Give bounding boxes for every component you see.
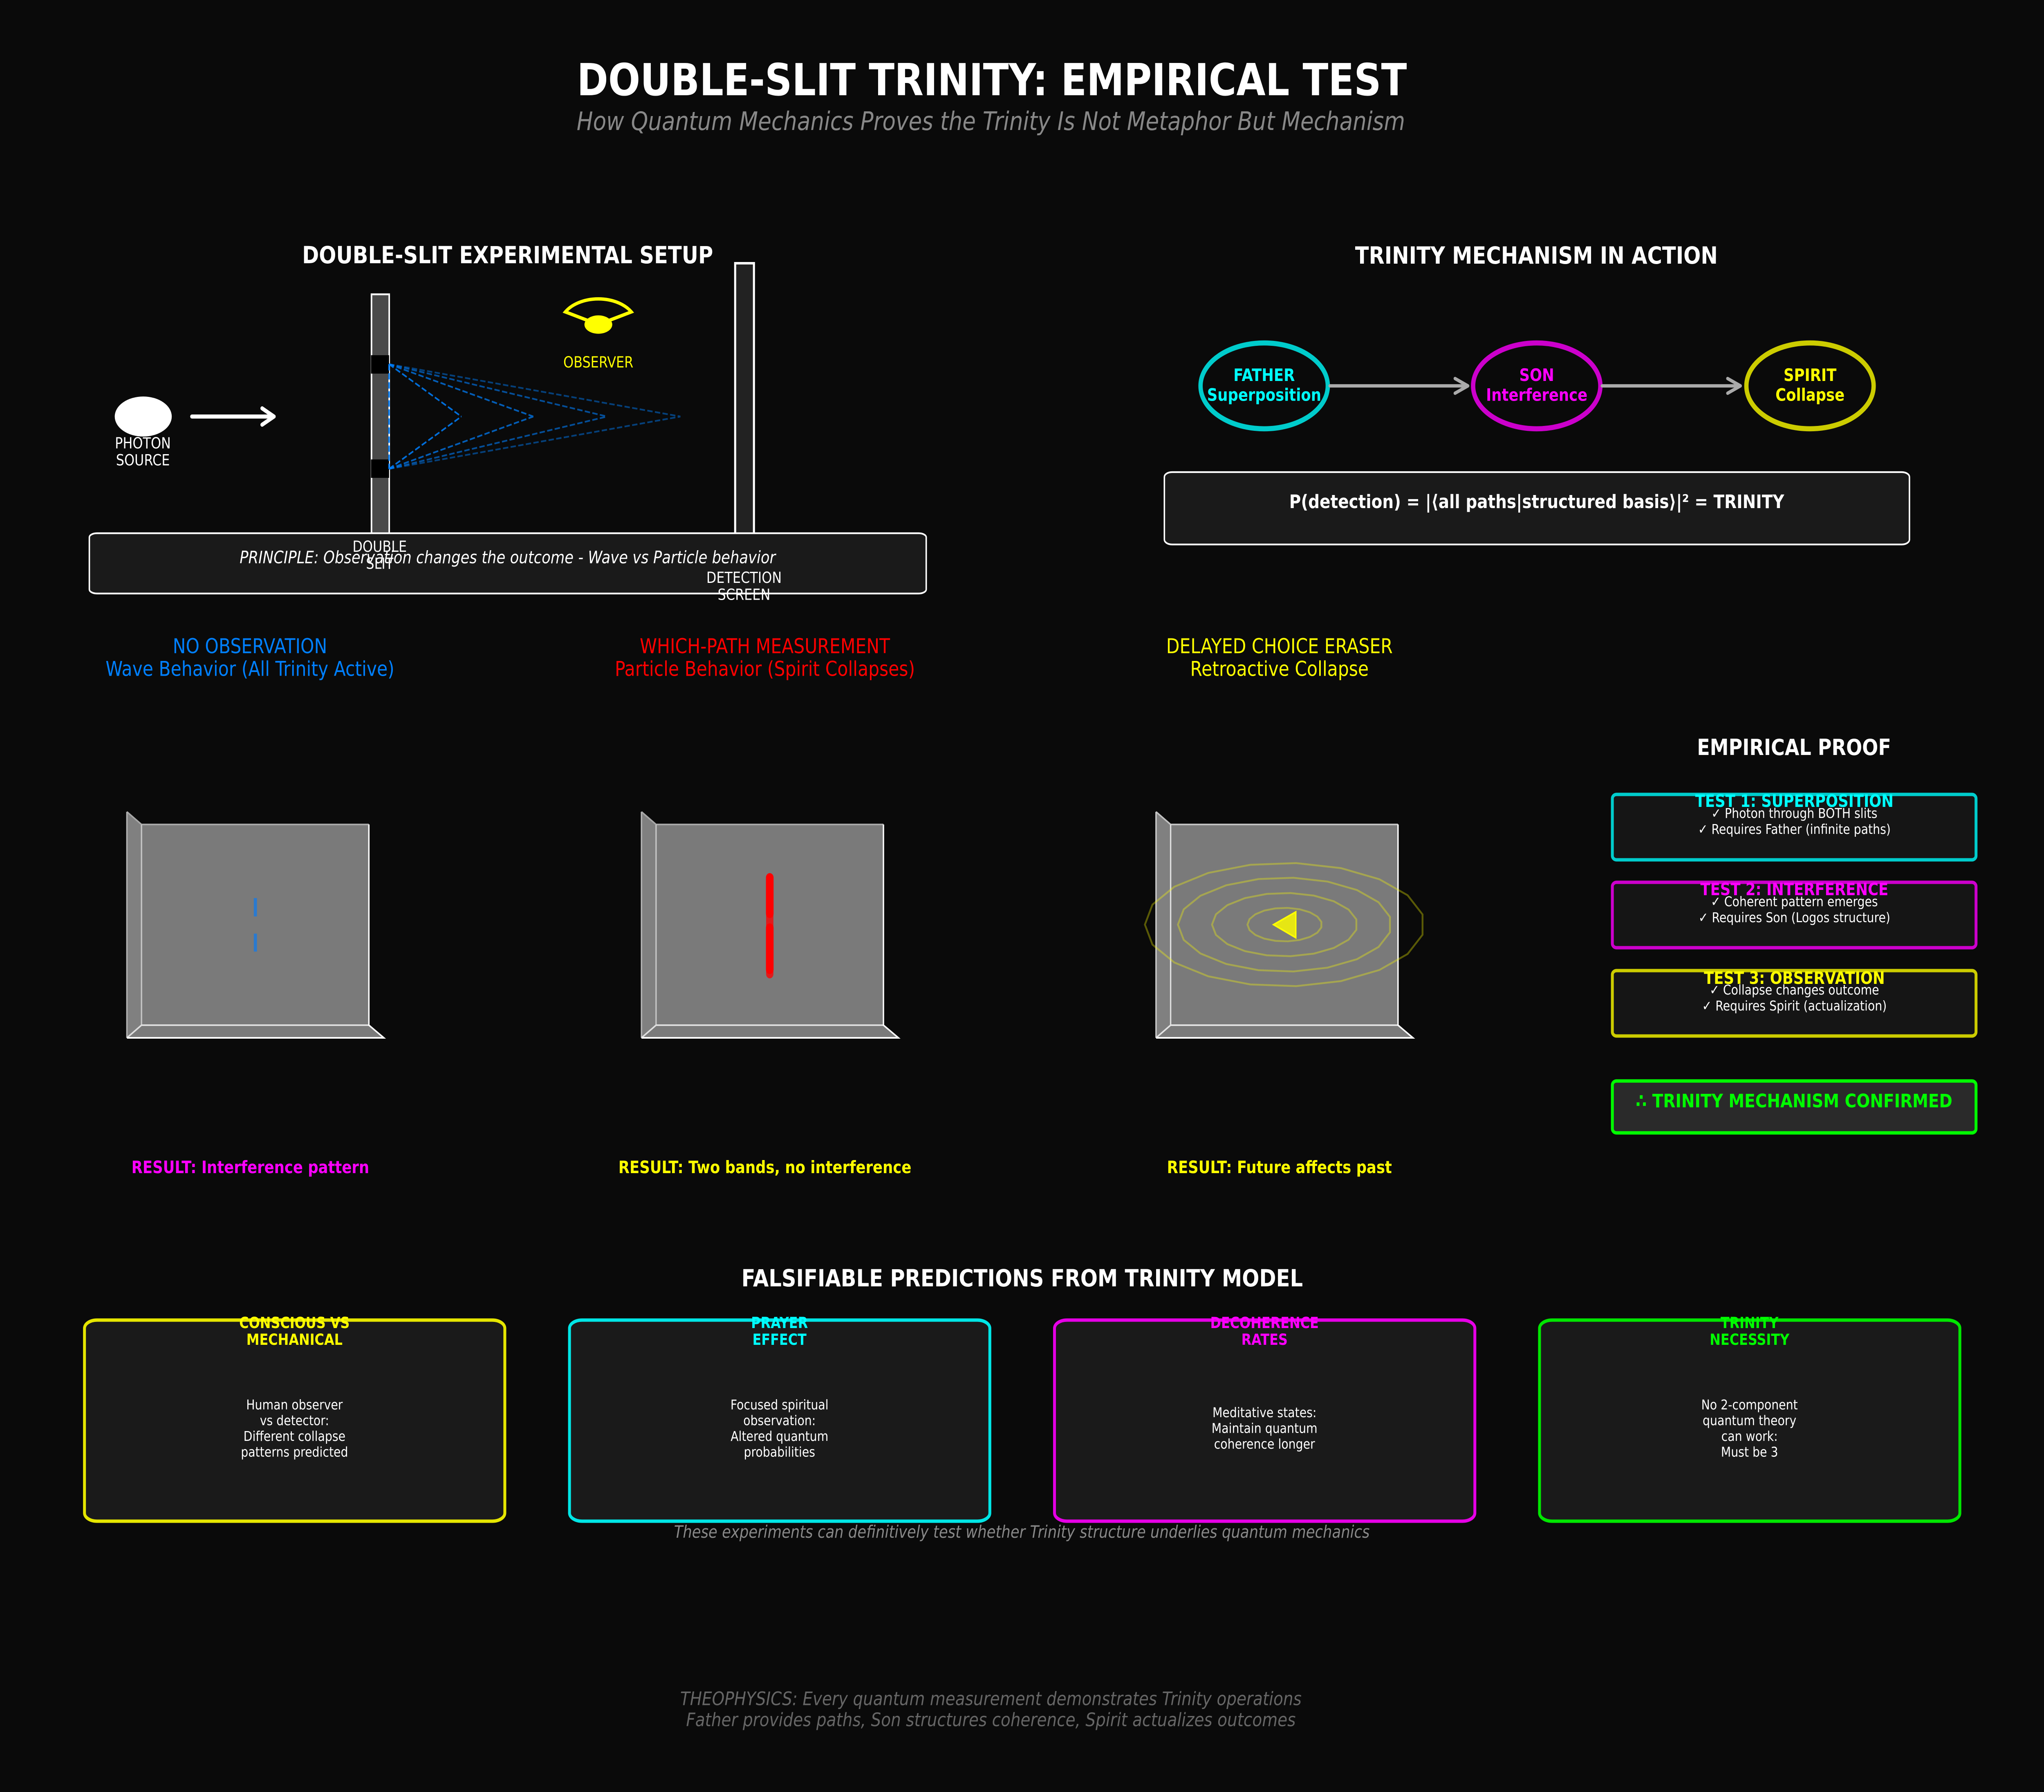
heading: falsifiable predictions: FALSIFIABLE PREDICTIONS FROM TRINITY MODEL [742, 1264, 1303, 1292]
prediction card: trinity necessity: Must be 3 [1721, 1444, 1778, 1460]
detection screen [735, 263, 754, 558]
callout: principle [90, 533, 926, 594]
result: two bands: RESULT: Two bands, no interference [619, 1158, 911, 1178]
label: detection screen: DETECTION [706, 569, 782, 587]
prediction card: conscious vs mechanical: Human observer [246, 1397, 343, 1413]
test 1 card: TEST 1: SUPERPOSITION [1695, 791, 1894, 811]
footer: Father provides paths, Son structures coherence, Spirit actualizes outcomes [686, 1709, 1295, 1731]
prediction card: decoherence rates: coherence longer [1214, 1436, 1315, 1452]
result: interference pattern: RESULT: Interference pattern [132, 1158, 369, 1178]
subtitle: How Quantum Mechanics Proves the Trinity Is Not Metaphor But Mechanism [577, 106, 1405, 136]
scenario heading: no observation: Wave Behavior (All Trinity Active) [105, 657, 394, 681]
icon: photon source [115, 396, 172, 437]
prediction card: conscious vs mechanical: patterns predicted [241, 1444, 348, 1460]
arrow: father to son [1330, 379, 1468, 393]
prediction card: decoherence rates [1055, 1315, 1475, 1521]
test 2 card [1612, 880, 1976, 948]
label: photon source: PHOTON [115, 435, 171, 452]
prediction card: conscious vs mechanical: CONSCIOUS VS [239, 1315, 350, 1332]
chart: interference pattern screen [127, 812, 384, 1038]
prediction card: prayer effect: EFFECT [753, 1331, 807, 1349]
wave paths through slits [389, 364, 680, 469]
panel: double-slit experimental setup [90, 241, 926, 604]
test 1 card: ✓ Requires Father (infinite paths) [1698, 822, 1891, 838]
prediction card: decoherence rates: Maintain quantum [1212, 1420, 1318, 1436]
node: spirit: Collapse [1775, 385, 1845, 405]
test 1 card: ✓ Photon through BOTH slits [1711, 806, 1877, 822]
prediction card: decoherence rates: Meditative states: [1213, 1405, 1316, 1421]
heading: setup: DOUBLE-SLIT EXPERIMENTAL SETUP [302, 241, 713, 269]
note: experiments: These experiments can definitively test whether Trinity structure underlies quantum mechanics [674, 1522, 1369, 1542]
test 3 card: ✓ Requires Spirit (actualization) [1702, 998, 1887, 1014]
node: father: FATHER [1233, 365, 1295, 385]
node: spirit [1746, 343, 1874, 429]
scenario heading: which-path measurement: Particle Behavior (Spirit Collapses) [615, 657, 915, 681]
test 3 card: ✓ Collapse changes outcome [1710, 982, 1879, 998]
prediction card: trinity necessity [1540, 1315, 1960, 1521]
footer: THEOPHYSICS: Every quantum measurement demonstrates Trinity operations [680, 1689, 1302, 1710]
prediction card: prayer effect: PRAYER [751, 1315, 808, 1332]
node: father: Superposition [1207, 385, 1321, 405]
prediction card: prayer effect: observation: [743, 1413, 816, 1429]
label: photon source: SOURCE [116, 452, 170, 469]
test 2 card: ✓ Requires Son (Logos structure) [1699, 910, 1890, 926]
arrow: photon direction [192, 408, 274, 425]
label: double slit: DOUBLE [352, 538, 407, 556]
prediction card: decoherence rates: DECOHERENCE [1210, 1315, 1319, 1332]
heading: empirical proof: EMPIRICAL PROOF [1697, 734, 1891, 760]
prediction card: conscious vs mechanical [85, 1315, 505, 1521]
panel: empirical proof [1612, 734, 1976, 1133]
prediction card: trinity necessity: TRINITY [1721, 1315, 1779, 1332]
principle text: PRINCIPLE: Observation changes the outcome - Wave vs Particle behavior [240, 548, 776, 568]
panel: falsifiable predictions [85, 1264, 1960, 1542]
result: future affects past: RESULT: Future affects past [1167, 1158, 1392, 1178]
test 2 card: TEST 2: INTERFERENCE [1700, 880, 1888, 900]
prediction card: trinity necessity: quantum theory [1703, 1413, 1796, 1429]
scenario heading: which-path measurement: WHICH-PATH MEASUREMENT [640, 634, 890, 658]
prediction card: conscious vs mechanical: vs detector: [260, 1413, 329, 1429]
prediction card: trinity necessity: No 2-component [1701, 1397, 1798, 1413]
test 2 card: ✓ Coherent pattern emerges [1711, 894, 1878, 910]
formula box [1164, 472, 1910, 544]
prediction card: decoherence rates: RATES [1242, 1331, 1288, 1349]
chart: delayed choice rings screen [1145, 812, 1423, 1038]
prediction card: prayer effect: Focused spiritual [731, 1397, 829, 1413]
test 3 card [1612, 968, 1976, 1036]
prediction card: conscious vs mechanical: Different collapse [244, 1429, 345, 1445]
test 1 card [1612, 791, 1976, 860]
prediction card: trinity necessity: can work: [1721, 1429, 1778, 1445]
node: son: Interference [1486, 385, 1587, 405]
prediction card: prayer effect [569, 1315, 990, 1521]
prediction card: prayer effect: Altered quantum [731, 1429, 828, 1445]
arrow: son to spirit [1602, 379, 1741, 393]
node: spirit: SPIRIT [1784, 365, 1837, 385]
chart: two bands screen [641, 812, 899, 1038]
label: double slit: SLIT [366, 555, 394, 573]
node: son [1473, 343, 1600, 429]
heading: trinity mechanism: TRINITY MECHANISM IN ACTION [1355, 242, 1718, 269]
prediction card: prayer effect: probabilities [744, 1444, 815, 1460]
node: son: SON [1519, 365, 1554, 385]
prediction card: conscious vs mechanical: MECHANICAL [247, 1331, 343, 1349]
node: father [1201, 343, 1328, 429]
formula text: P(detection) = |⟨all paths|structured basis⟩|² = TRINITY [1289, 491, 1785, 513]
scenario heading: no observation: NO OBSERVATION [173, 634, 327, 658]
conclusion card: ∴ TRINITY MECHANISM CONFIRMED [1636, 1091, 1952, 1112]
label: observer: OBSERVER [563, 354, 633, 372]
conclusion card [1612, 1081, 1976, 1133]
barrier with two slits [371, 294, 389, 556]
scenario heading: delayed choice eraser: Retroactive Collapse [1190, 657, 1369, 681]
label: detection screen: SCREEN [718, 586, 770, 604]
test 3 card: TEST 3: OBSERVATION [1704, 968, 1885, 988]
panel: trinity mechanism in action [1164, 242, 1910, 544]
prediction card: trinity necessity: NECESSITY [1710, 1331, 1790, 1349]
scenario heading: delayed choice eraser: DELAYED CHOICE ERASER [1166, 634, 1393, 658]
icon: observer eye [565, 299, 631, 334]
title: DOUBLE-SLIT TRINITY: EMPIRICAL TEST [577, 54, 1407, 106]
